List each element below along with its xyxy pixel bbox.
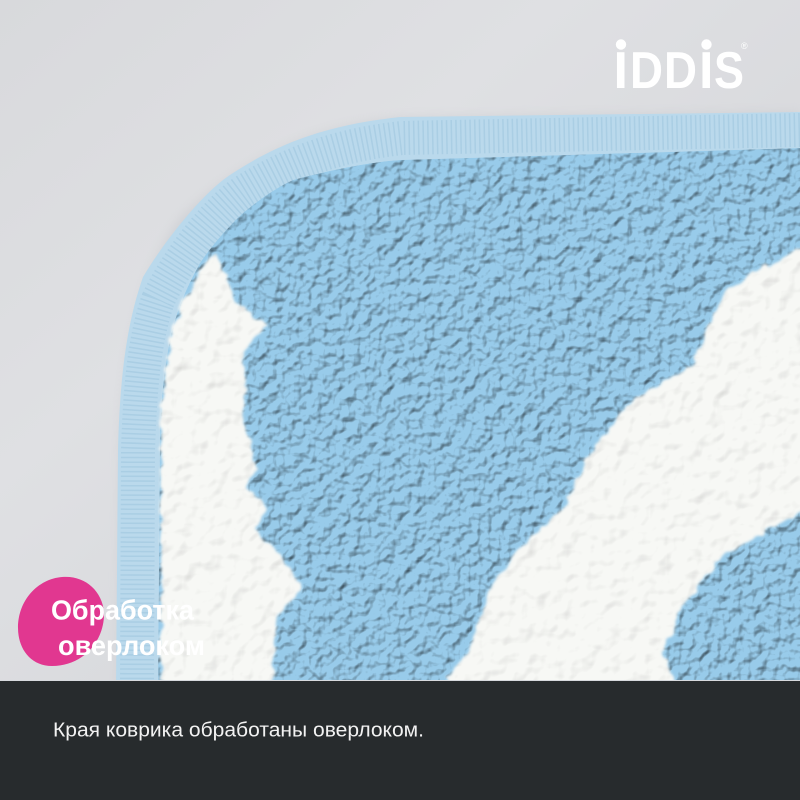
logo: IDDIS: I <box>699 42 713 100</box>
blue pile <box>158 148 800 690</box>
logo: IDDIS: D <box>630 42 663 100</box>
logo: IDDIS <box>614 39 748 100</box>
badge heading <box>51 594 205 661</box>
logo: IDDIS: S <box>714 42 744 100</box>
logo: IDDIS: ® <box>741 41 748 51</box>
overlock edge <box>116 112 800 690</box>
caption panel <box>0 680 800 800</box>
white stripe: right diagonal <box>445 240 800 695</box>
white stripe: left <box>160 250 303 690</box>
badge heading: оверлоком <box>58 630 205 661</box>
caption text: Края коврика обработаны оверлоком. <box>53 718 424 742</box>
badge heading: Обработка <box>51 594 194 626</box>
logo: IDDIS: I <box>614 42 628 100</box>
photo: bath mat corner <box>116 112 800 695</box>
logo: IDDIS: D <box>664 42 697 100</box>
badge: pink blob <box>18 577 104 666</box>
